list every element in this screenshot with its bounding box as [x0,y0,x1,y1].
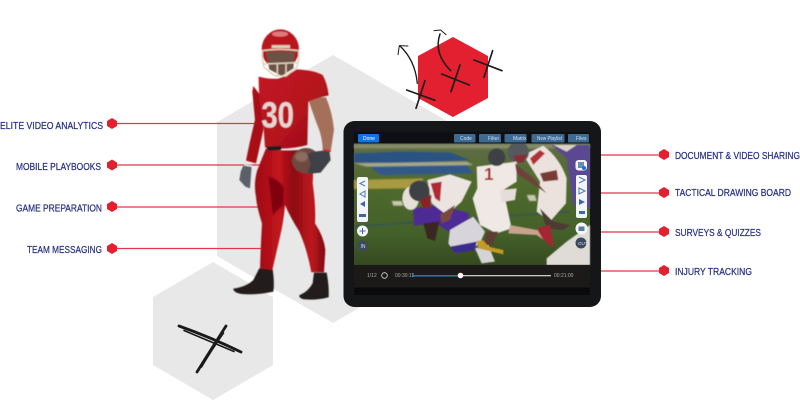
right player [523,146,567,222]
right glove [307,151,331,174]
button: done [358,134,379,142]
out button [576,238,588,248]
right video control strip [576,175,587,218]
left red hex bullets [107,118,117,254]
button: code [454,134,476,142]
label: surveys and quizzes: SURVEYS & QUIZZES [675,227,761,239]
facemask [262,47,299,76]
label: game preparation: GAME PREPARATION [16,202,102,214]
label: team messaging: TEAM MESSAGING [27,244,102,256]
jersey number: 30 [261,94,294,135]
connector lines left [112,124,261,248]
document share button [576,160,587,170]
tablet screen [354,132,590,295]
top bar [354,132,590,143]
button: filter [479,134,501,142]
field [354,143,590,265]
player pants [255,148,325,272]
button: matrix [504,134,527,142]
out button: OUT [578,241,588,246]
button: new playlist: New Playlist [537,136,563,142]
playback controls: 00:21:00 [554,273,574,279]
ball [292,148,320,173]
helmet [262,29,299,69]
button: matrix: Matrix [513,136,527,142]
button: done: Done [363,136,375,142]
playback controls: 00:30:15 [395,273,415,279]
player left sleeve [246,86,264,163]
player shoes [233,268,329,300]
player skin arm [308,97,334,152]
bottom right player [547,225,590,265]
players [402,142,590,265]
runner [413,205,469,235]
button: code: Code [460,136,472,142]
sketched arrows and crosses [398,30,502,108]
button: new playlist [532,134,564,142]
connector lines right [601,155,664,271]
video frame [354,132,590,295]
left feature labels [0,120,103,256]
right red hex bullets [659,149,669,276]
button: files: Files [576,136,587,142]
tablet [344,121,601,307]
playback controls [367,273,574,279]
football player [233,29,334,300]
label: injury tracking: INJURY TRACKING [675,266,752,278]
number one player [473,162,517,233]
red hexagon [418,37,488,117]
shoe [475,245,495,263]
end zone lettering [354,144,590,227]
label: mobile playbooks: MOBILE PLAYBOOKS [16,161,101,173]
player jersey [259,69,329,149]
belt [266,146,282,151]
left video control strip: IN [360,244,366,250]
left glove [239,164,252,188]
playback controls: 1/12 [367,273,377,279]
large grey hexagon [217,55,449,323]
tablet body [344,121,601,307]
players: 1 [484,164,494,184]
left video control strip [357,177,368,252]
playback bar [354,265,590,288]
right background player [552,145,590,208]
button: filter: Filter [488,136,499,142]
button: files [568,134,589,142]
camera button [576,222,588,234]
tackler [427,174,472,215]
face [266,52,295,76]
black sketched X [179,326,241,372]
right feature labels [675,150,800,278]
small grey hexagon [153,262,273,400]
label: elite video analytics: ELITE VIDEO ANALYTICS [0,120,103,132]
